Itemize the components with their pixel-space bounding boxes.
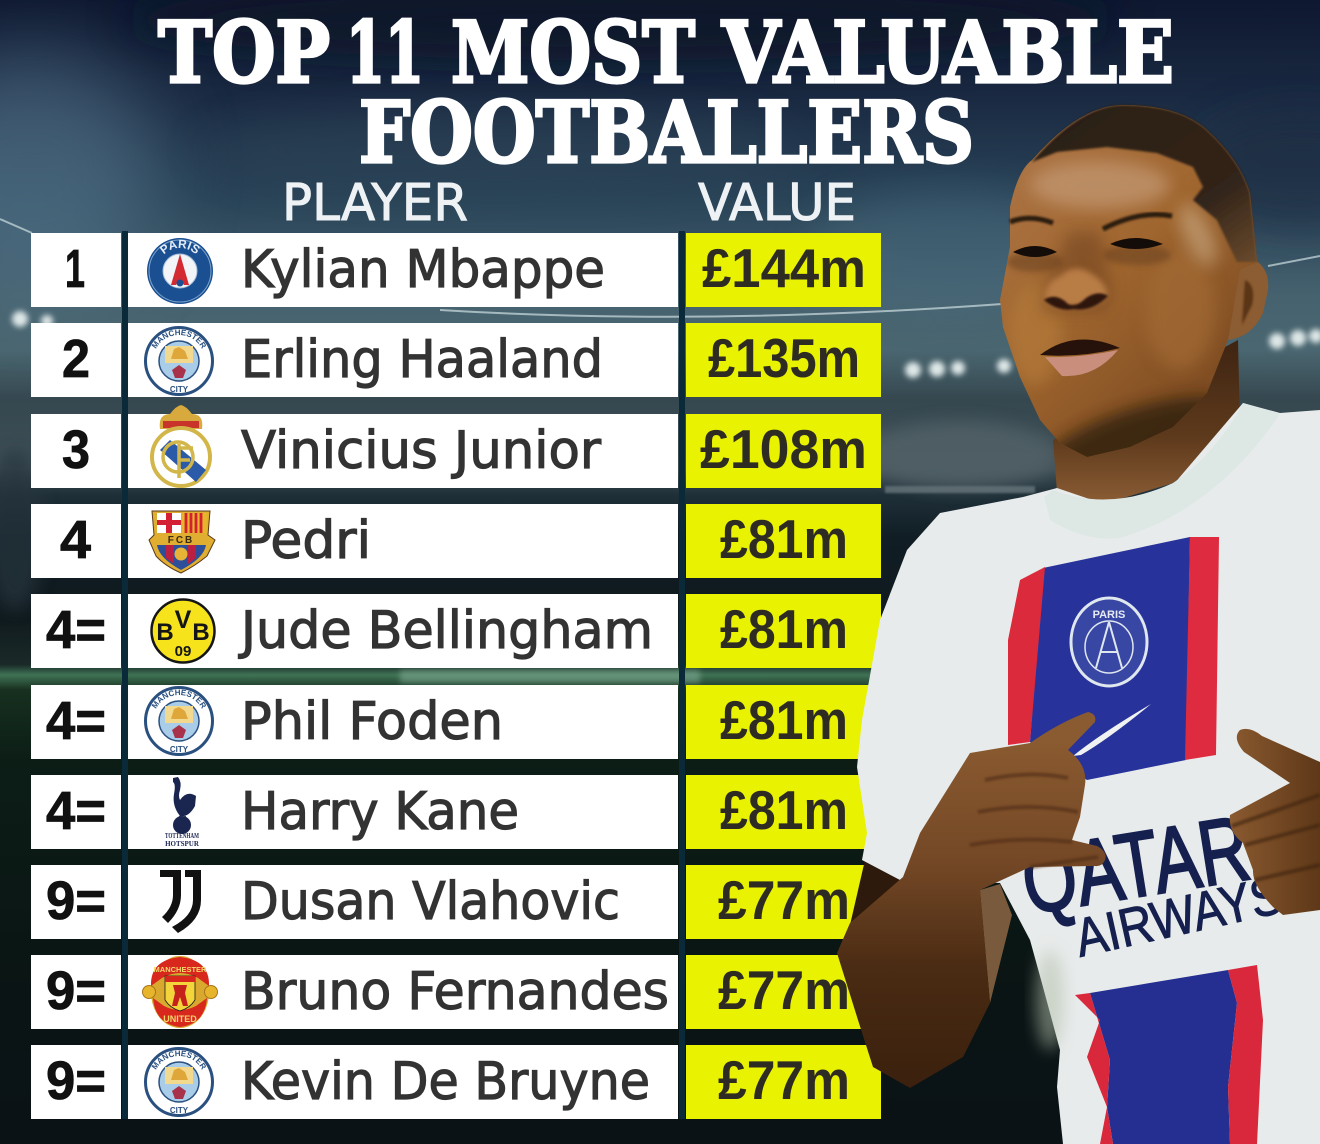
icon: Manchester United crest [142, 956, 218, 1028]
finger creases [970, 774, 1098, 867]
row 2: 2 [62, 329, 90, 389]
row 4: Pedri [241, 511, 371, 571]
row 4: £81m [720, 508, 848, 570]
row 6: Phil Foden [241, 692, 503, 752]
sponsor text [1015, 797, 1288, 969]
column headings: VALUE [698, 174, 856, 233]
mouth [1040, 339, 1120, 376]
row 7: Harry Kane [241, 782, 519, 842]
shirt torso shadow [1036, 950, 1064, 1050]
icon: Manchester United crest: UNITED [163, 1014, 197, 1024]
row 2: Erling Haaland [241, 330, 603, 390]
row 2 [31, 323, 881, 397]
icon: Borussia Dortmund crest: 09 [175, 643, 191, 660]
row 5: 4= [46, 600, 106, 660]
swoosh [1073, 704, 1151, 756]
icon: Manchester City crest: MANCHESTER [152, 330, 206, 349]
icon: Manchester City crest [144, 1047, 214, 1117]
icon: Juventus crest [160, 870, 201, 933]
hair [1032, 105, 1257, 262]
row 1: £144m [702, 237, 866, 299]
collar [1044, 403, 1280, 539]
row 8: Dusan Vlahovic [241, 872, 620, 932]
icon: Borussia Dortmund crest [152, 600, 214, 662]
icon: Manchester City crest: CITY [170, 385, 189, 394]
right hand creases [1232, 795, 1320, 880]
row 3 [31, 414, 881, 488]
title: 11 [346, 3, 424, 102]
row 6: 4= [46, 691, 106, 751]
icon: PSG crest: PARIS [160, 240, 200, 254]
eyes [1013, 238, 1163, 257]
icon: Manchester City crest [144, 686, 214, 756]
row 1 [31, 233, 881, 307]
row 10: £77m [718, 1049, 850, 1111]
row 5: £81m [720, 598, 848, 660]
row 1: Kylian Mbappe [241, 240, 605, 300]
row 9: 9= [46, 961, 106, 1021]
title [158, 3, 1174, 182]
icon: Real Madrid crest [152, 405, 210, 486]
row 5 [31, 594, 881, 668]
icon: Borussia Dortmund crest: B [156, 619, 174, 646]
icon: Manchester City crest: MANCHESTER [152, 1050, 206, 1070]
row 7: £81m [720, 779, 848, 841]
nose [1044, 268, 1108, 310]
row 6 [31, 685, 881, 759]
upper blue and red chest stripes [1008, 537, 1219, 780]
row 8 [31, 865, 881, 939]
sponsor text: AIRWAYS [1070, 865, 1288, 969]
icon: Manchester City crest: CITY [170, 745, 189, 754]
row 1: 1 [65, 239, 85, 299]
row 8: 9= [46, 871, 106, 931]
row 5: Jude Bellingham [238, 601, 653, 661]
right hand [1230, 729, 1320, 915]
PSG shirt badge: PARIS [1093, 609, 1125, 621]
title: VALUABLE [721, 3, 1174, 102]
row 4: 4 [60, 510, 91, 570]
lower blue and red stripes [1075, 965, 1263, 1144]
row 3: Vinicius Junior [241, 421, 602, 481]
icon: Borussia Dortmund crest: B [192, 619, 210, 646]
icon: Tottenham crest [165, 777, 200, 848]
title: FOOTBALLERS [359, 83, 974, 182]
row 8: £77m [718, 869, 850, 931]
PSG shirt badge [1071, 598, 1147, 686]
eyebrows [1010, 215, 1172, 229]
player illustration [837, 100, 1320, 1144]
row 6: £81m [720, 689, 848, 751]
row 7 [31, 775, 881, 849]
row 9: Bruno Fernandes [241, 962, 669, 1022]
row 3: 3 [62, 420, 90, 480]
upper arm behind forearm [850, 860, 1000, 1000]
icon: Barcelona crest: FCB [168, 535, 194, 546]
row 10: 9= [46, 1051, 106, 1111]
icon: Barcelona crest [149, 511, 215, 573]
icon: Tottenham crest: TOTTENHAM [165, 832, 199, 840]
row 10: Kevin De Bruyne [241, 1052, 650, 1112]
title: TOP [158, 3, 330, 102]
icon: Tottenham crest: HOTSPUR [165, 840, 200, 848]
icon: Manchester United crest: MANCHESTER [154, 965, 207, 974]
table dividers [122, 231, 685, 1119]
row 4 [31, 504, 881, 578]
icon: Manchester City crest [144, 326, 214, 396]
ear [1228, 262, 1268, 340]
inner forearm highlight [980, 884, 1012, 1003]
neck [1053, 340, 1240, 503]
title: MOST [451, 3, 695, 102]
head [1000, 105, 1257, 457]
shirt [857, 403, 1320, 1144]
icon: Manchester City crest: MANCHESTER [152, 690, 206, 709]
column headings: PLAYER [282, 174, 468, 233]
row 7: 4= [46, 781, 106, 841]
forearm and left hand [837, 712, 1106, 1088]
row 9: £77m [718, 959, 850, 1021]
icon: PSG crest [147, 238, 213, 304]
column headings [282, 174, 856, 233]
icon: Borussia Dortmund crest: V [175, 606, 192, 634]
row 10 [31, 1045, 881, 1119]
row 2: £135m [708, 327, 860, 389]
row 9 [31, 955, 881, 1029]
icon: Manchester City crest: CITY [170, 1106, 189, 1115]
row 3: £108m [700, 418, 867, 480]
